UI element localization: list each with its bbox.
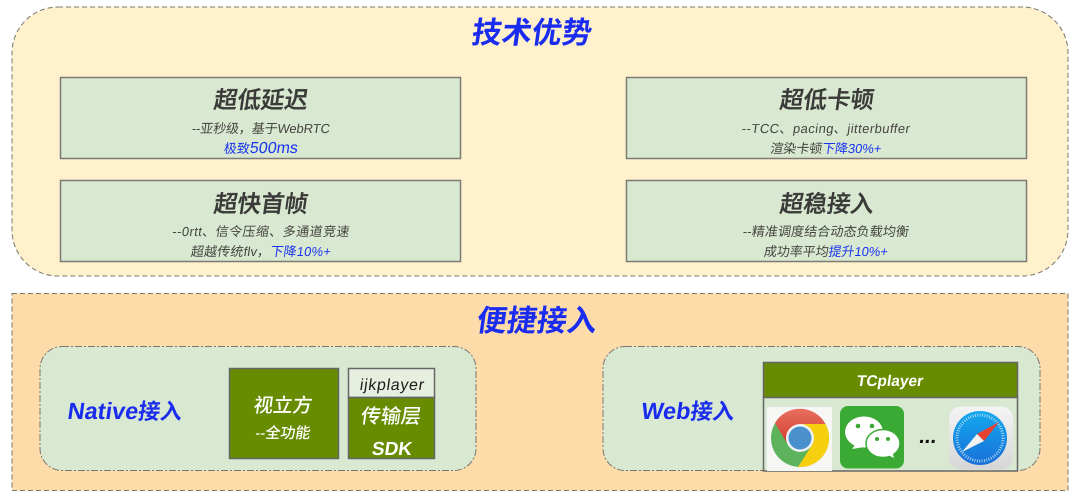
box: transport layer SDK (348, 398, 434, 460)
card: ultra-fast first frame: --0rtt、信令压缩、多通道竞速 (171, 224, 351, 239)
box: full-feature SDK (230, 368, 338, 458)
card: ultra-low stutter: 超低卡顿 (778, 87, 876, 114)
box: transport layer SDK: SDK (370, 439, 414, 460)
card: ultra-stable access: 超稳接入 (778, 191, 876, 218)
card: ultra-fast first frame: 超快首帧 (212, 191, 310, 218)
card: ultra-low stutter: --TCC、pacing、jitterbuffer (741, 121, 912, 136)
box: TCplayer: TCplayer (856, 373, 924, 390)
card: ultra-low stutter: 渲染卡顿下降30%+ (769, 141, 883, 156)
icon: chrome (767, 407, 832, 471)
card: ultra-low latency (60, 78, 460, 158)
heading: easy integration: 便捷接入 (475, 304, 599, 338)
label: native integration: Native接入 (66, 399, 184, 425)
panel: easy integration (12, 294, 1068, 490)
card: ultra-low latency: 极致500ms (223, 139, 299, 157)
card: ultra-low stutter (626, 78, 1026, 158)
box: full-feature SDK: --全功能 (254, 424, 312, 442)
card: ultra-low latency: 超低延迟 (212, 87, 310, 114)
icon: safari (949, 406, 1013, 470)
box: ijkplayer: ijkplayer (359, 376, 426, 394)
card: ultra-stable access: 成功率平均提升10%+ (763, 244, 889, 259)
box: transport layer SDK: 传输层 (359, 405, 423, 428)
box: ijkplayer (348, 368, 434, 398)
panel: native integration (40, 346, 476, 470)
panel: technical advantages (12, 7, 1068, 276)
card: ultra-stable access: --精准调度结合动态负载均衡 (742, 224, 910, 239)
heading: technical advantages: 技术优势 (470, 16, 594, 50)
box: player container (764, 397, 1018, 471)
card: ultra-stable access (626, 180, 1026, 262)
text: ellipsis: ... (918, 425, 938, 448)
card: ultra-fast first frame: 超越传统flv，下降10%+ (190, 244, 332, 259)
icon: wechat (840, 406, 904, 468)
label: web integration: Web接入 (640, 399, 736, 425)
panel: web integration (603, 346, 1040, 471)
box: TCplayer (764, 362, 1018, 398)
card: ultra-fast first frame (60, 180, 460, 262)
box: full-feature SDK: 视立方 (252, 394, 314, 417)
card: ultra-low latency: --亚秒级，基于WebRTC (191, 121, 331, 136)
